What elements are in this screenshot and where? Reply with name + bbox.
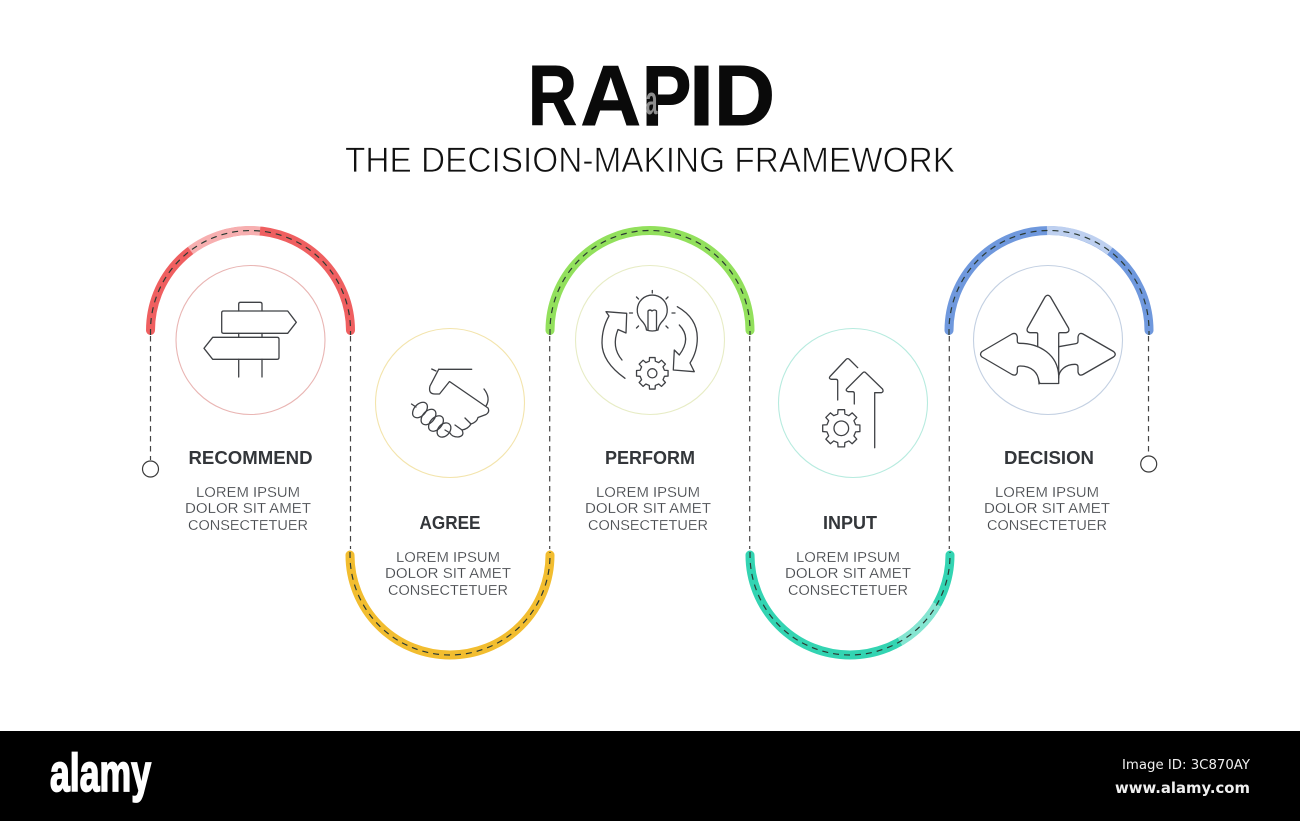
text: input: CONSECTETUER: [788, 583, 908, 599]
icon ring: [576, 266, 724, 414]
text: recommend: [185, 485, 311, 534]
text: decision: CONSECTETUER: [987, 518, 1107, 534]
title: [528, 49, 775, 144]
label: agree: AGREE: [420, 513, 480, 533]
connector line: [749, 336, 751, 549]
text: agree: CONSECTETUER: [388, 583, 508, 599]
footer bar: [0, 731, 1300, 821]
connector line: [549, 336, 551, 549]
text: perform: DOLOR SIT AMET: [585, 501, 711, 517]
icon ring: [974, 266, 1122, 414]
text: agree: LOREM IPSUM: [396, 550, 500, 566]
text: decision: [984, 485, 1110, 534]
title: I: [689, 49, 714, 144]
title: P: [642, 49, 691, 144]
footer logo: alamy: [50, 744, 151, 803]
subtitle: THE DECISION-MAKING FRAMEWORK: [345, 141, 955, 180]
text: agree: DOLOR SIT AMET: [385, 566, 511, 582]
connector line and end node: [1141, 336, 1157, 472]
label: recommend: RECOMMEND: [188, 448, 312, 468]
icon ring: [376, 328, 524, 478]
panel: recommend: [142, 231, 350, 534]
connector line: [350, 336, 352, 549]
arc: recommend: [150, 231, 350, 335]
panel: perform: [550, 230, 750, 549]
panel: agree: [350, 328, 550, 655]
text: input: [785, 550, 911, 599]
text: recommend: DOLOR SIT AMET: [185, 501, 311, 517]
text: recommend: LOREM IPSUM: [196, 485, 300, 501]
panel: decision: [949, 230, 1157, 549]
icon: signpost: [204, 302, 296, 377]
arc: perform: [550, 230, 750, 335]
text: input: LOREM IPSUM: [796, 550, 900, 566]
icon: handshake: [410, 369, 489, 440]
icon ring: [176, 266, 325, 414]
title: A: [580, 49, 641, 144]
connector line: [948, 336, 950, 549]
text: perform: [585, 485, 711, 534]
arc: decision: [949, 230, 1149, 335]
text: decision: DOLOR SIT AMET: [984, 501, 1110, 517]
text: agree: [385, 550, 511, 599]
text: input: DOLOR SIT AMET: [785, 566, 911, 582]
label: perform: PERFORM: [605, 448, 695, 468]
icon ring: [778, 328, 928, 478]
footer image id: Image ID: 3C870AY: [1122, 757, 1251, 773]
title: D: [714, 49, 775, 144]
icon: three-way arrows: [980, 295, 1115, 384]
text: perform: CONSECTETUER: [588, 518, 708, 534]
icon: arrows and gear: [823, 359, 883, 448]
icon: bulb, cycle arrows and gear: [602, 290, 697, 389]
panel: input: [750, 328, 950, 655]
title: R: [528, 49, 577, 144]
connector line and end node: [142, 336, 158, 477]
text: recommend: CONSECTETUER: [188, 518, 308, 534]
footer url: www.alamy.com: [1115, 779, 1250, 797]
text: decision: LOREM IPSUM: [995, 485, 1099, 501]
text: perform: LOREM IPSUM: [596, 485, 700, 501]
label: input: INPUT: [823, 513, 877, 533]
title: a: [646, 79, 658, 123]
arc: agree: [350, 552, 550, 655]
label: decision: DECISION: [1004, 448, 1094, 468]
arc: input: [750, 552, 950, 655]
